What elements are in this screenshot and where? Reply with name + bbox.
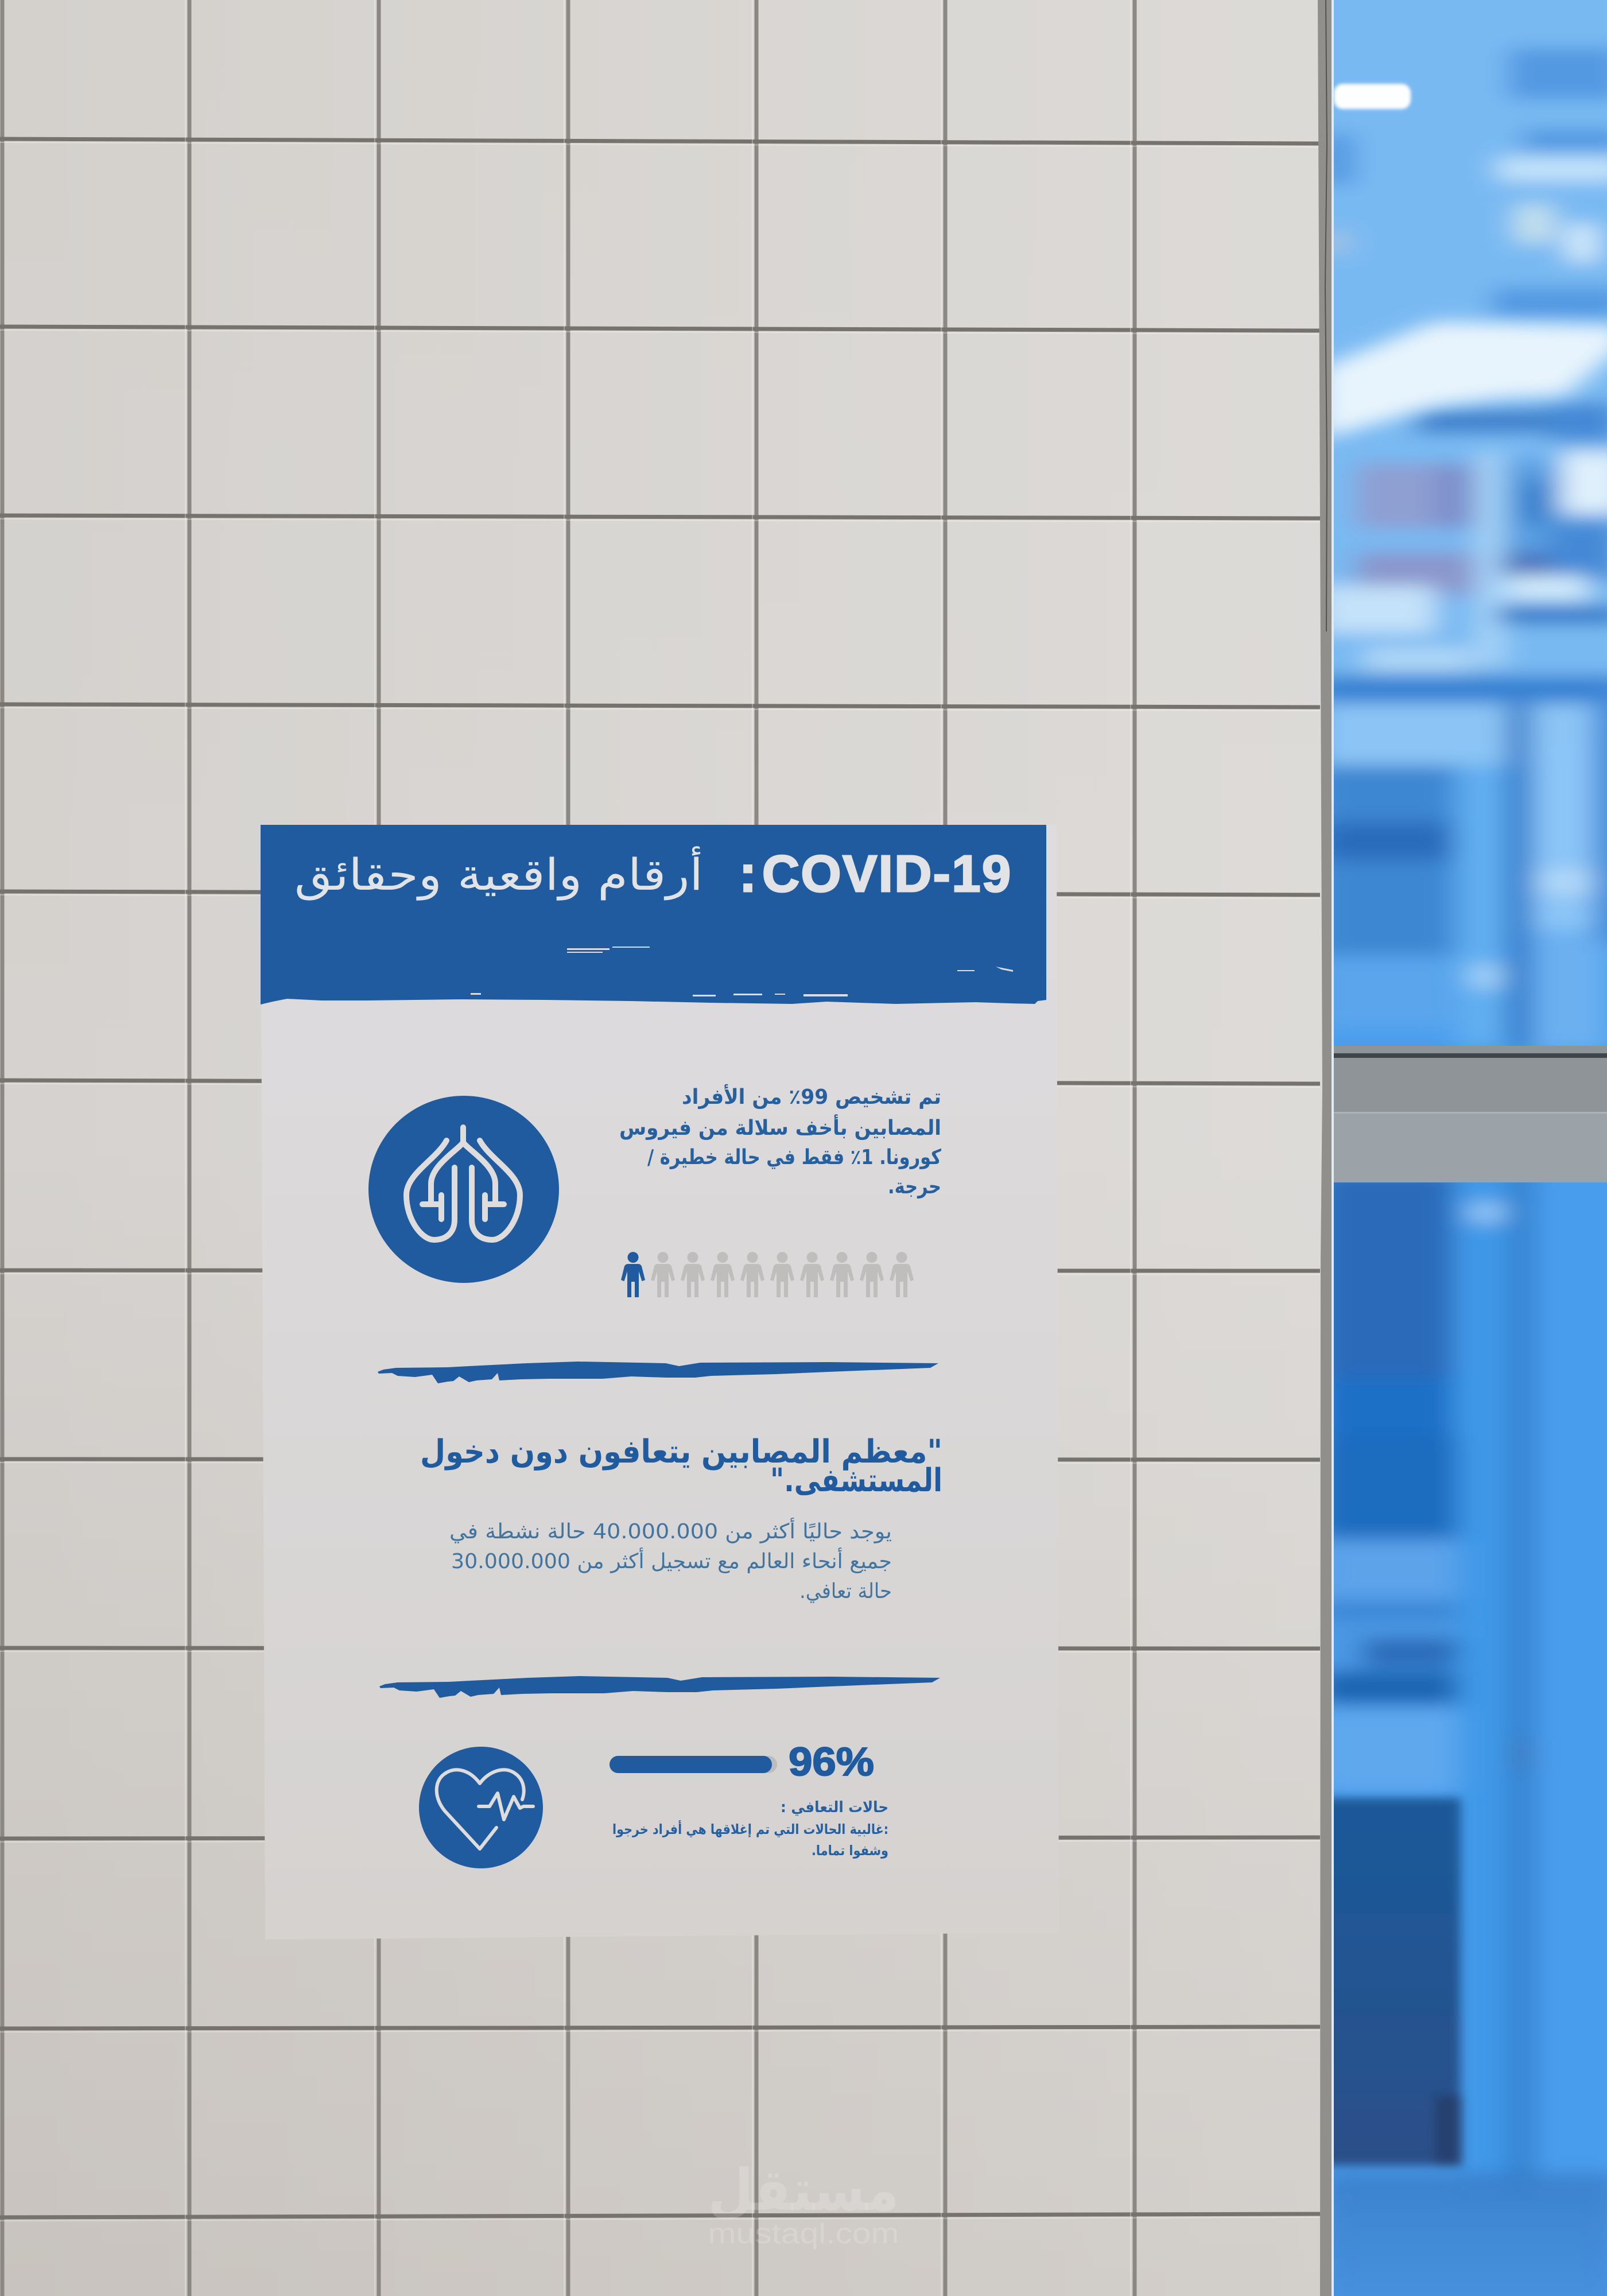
text block: active and recovered cases: يوجد حاليًا أكثر من 40.000.000 حالة نشطة في <box>449 1518 892 1543</box>
watermark: مستقل <box>708 2157 899 2224</box>
heading: most patients recover: "معظم المصابين يتعافون دون دخول <box>420 1433 942 1471</box>
stat: 96%: 96% <box>789 1739 874 1784</box>
heading: most patients recover <box>420 1433 942 1499</box>
window with blurred blue view <box>1334 0 1607 2296</box>
text block: severity statement: كورونا. 1٪ فقط في حالة خطيرة / <box>647 1146 941 1169</box>
progress bar: 96 percent <box>610 1739 874 1784</box>
title <box>294 846 1011 903</box>
text block: severity statement <box>619 1084 941 1199</box>
text block: severity statement: حرجة. <box>888 1175 941 1199</box>
text block: active and recovered cases: جميع أنحاء العالم مع تسجيل أكثر من 30.000.000 <box>451 1548 892 1573</box>
panel: poster <box>261 825 1059 1940</box>
text block: active and recovered cases <box>449 1518 892 1603</box>
title: : <box>739 846 756 903</box>
text block: severity statement: المصابين بأخف سلالة من فيروس <box>619 1114 941 1140</box>
wall edge: grout corner strip <box>1318 0 1333 2296</box>
window frame crossbar <box>1333 1046 1607 1182</box>
text block: active and recovered cases: حالة تعافي. <box>799 1580 892 1603</box>
text block: recovered cases note: حالات التعافي : <box>781 1799 888 1816</box>
text block: recovered cases note: :غالبية الحالات التي تم إغلاقها هي أفراد خرجوا <box>612 1820 888 1837</box>
watermark <box>708 2157 899 2250</box>
icon: lungs in blue circle <box>368 1096 559 1283</box>
header band with brushed lower edge <box>261 825 1046 1004</box>
pictogram: one in ten people <box>621 1252 914 1297</box>
text block: severity statement: تم تشخيص 99٪ من الأفراد <box>682 1084 941 1109</box>
title: أرقام واقعية وحقائق <box>294 846 703 901</box>
poster sheet <box>261 825 1059 1940</box>
icon: heart with pulse in blue circle <box>419 1747 543 1868</box>
brush flecks in header band <box>471 947 1013 996</box>
text block: recovered cases note <box>612 1799 888 1859</box>
heading: most patients recover: المستشفى." <box>770 1462 942 1499</box>
watermark: mustaql.com <box>708 2217 899 2250</box>
text block: recovered cases note: وشفوا تماما. <box>812 1843 888 1859</box>
title: COVID-19 <box>762 846 1011 903</box>
